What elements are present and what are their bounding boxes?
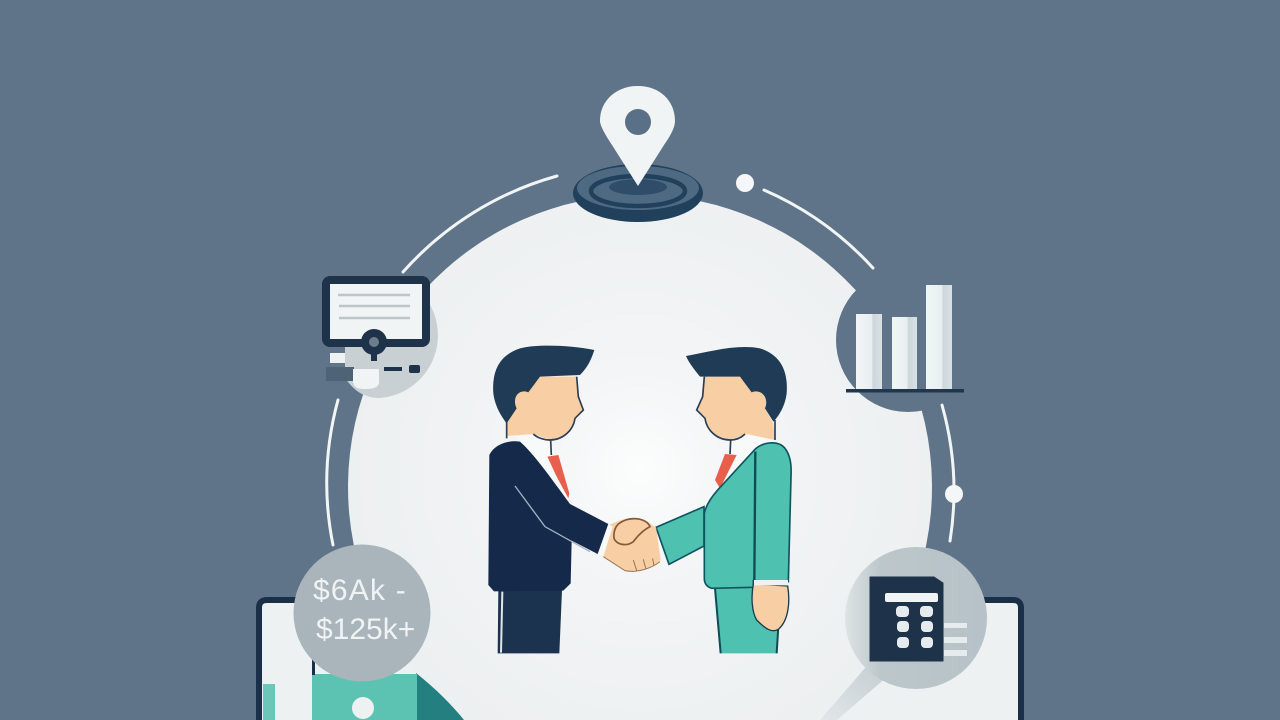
hair: [493, 346, 594, 423]
icon: chart node: [836, 268, 980, 412]
banknote: [312, 674, 417, 720]
arm and jacket: [656, 507, 704, 564]
salary range text upper bound: $125k+: [316, 613, 415, 646]
icon: monitor node: [326, 280, 438, 398]
orbit dot right: [945, 485, 963, 503]
teal wedge: [416, 673, 464, 720]
icon: calculator node: [820, 547, 987, 720]
trousers: [715, 587, 778, 653]
clasped hands: [598, 518, 661, 571]
salary range text: $6Ak -: [313, 574, 407, 607]
face: [697, 377, 775, 440]
face: [507, 377, 583, 440]
bottom panel: [259, 600, 1021, 720]
tie: [547, 455, 569, 498]
tie: [715, 454, 737, 488]
hair: [686, 347, 787, 422]
icon: location pin on target: [573, 86, 703, 222]
orbit ring arcs: [327, 176, 954, 545]
right businessman: [656, 347, 791, 653]
central disc: [348, 195, 932, 720]
trousers: [498, 590, 562, 653]
handshake figures: [488, 346, 791, 653]
jacket: [488, 441, 608, 591]
left businessman: [488, 346, 608, 653]
salary bubble: [294, 544, 430, 682]
collar and neck: [507, 420, 569, 502]
collar: [718, 420, 775, 488]
money node: [294, 544, 464, 720]
hanging hand: [752, 584, 789, 631]
orbit dot top right: [736, 174, 754, 192]
